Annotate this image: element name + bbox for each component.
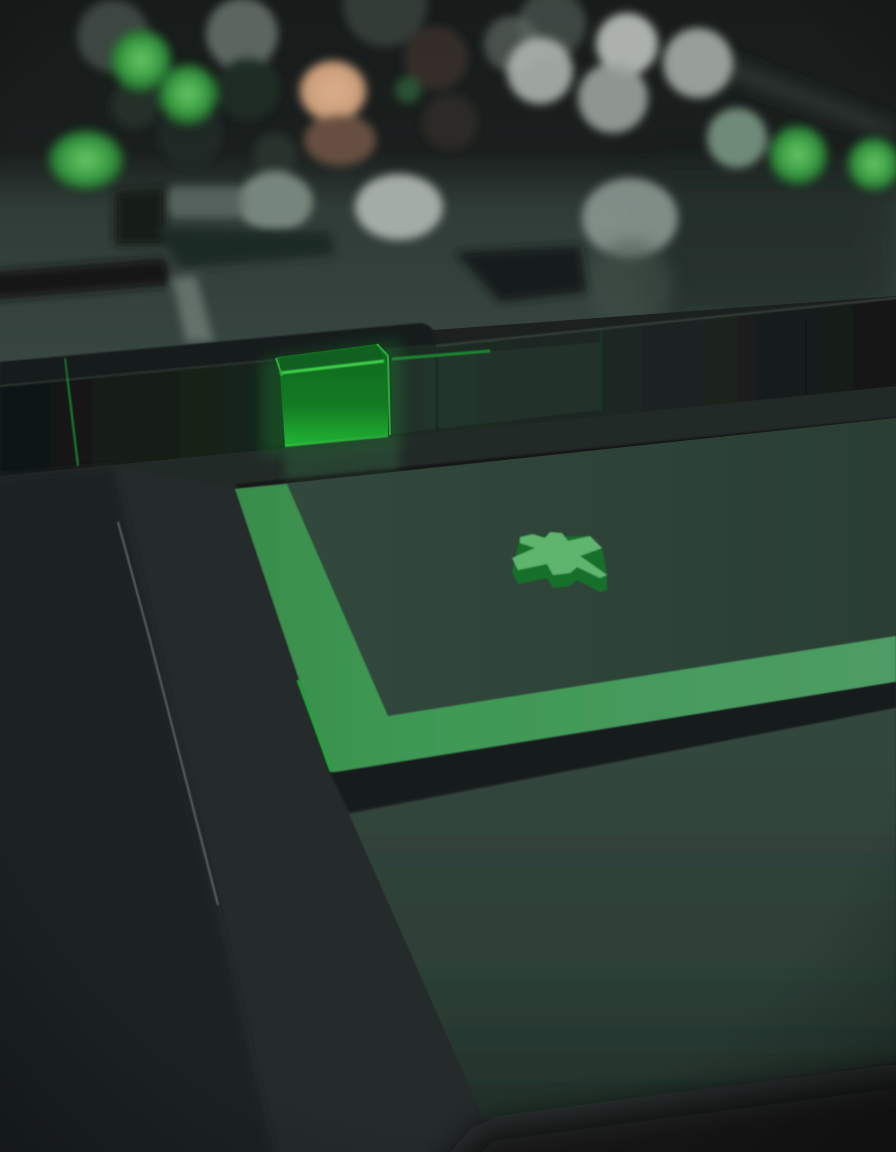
bottom shadow	[430, 1076, 896, 1152]
shadow gap under panel	[330, 682, 896, 812]
icon: green clover token	[512, 532, 607, 592]
bokeh lights	[48, 0, 896, 258]
left dark strip	[0, 466, 275, 1152]
border glow edge	[298, 680, 331, 770]
far rail highlight	[720, 55, 896, 140]
base ledge and surface	[0, 388, 896, 1152]
icon: white lights	[165, 13, 733, 258]
green border	[235, 484, 896, 774]
ledge	[113, 386, 896, 488]
far surface shading	[640, 170, 896, 320]
glowing green block	[262, 340, 400, 480]
light streak	[118, 522, 218, 905]
blurred desk blocks	[0, 188, 587, 342]
upper desk edge	[0, 296, 896, 400]
back lip of rail	[0, 323, 436, 386]
icon: amber lights	[299, 60, 376, 166]
upper panel with green border	[235, 418, 896, 775]
lower panel	[349, 708, 896, 1120]
background upper surface	[0, 0, 896, 400]
reflection	[588, 240, 672, 330]
rail bar	[0, 297, 896, 478]
icon: green lights	[48, 29, 896, 191]
ledge dark line	[236, 419, 896, 486]
